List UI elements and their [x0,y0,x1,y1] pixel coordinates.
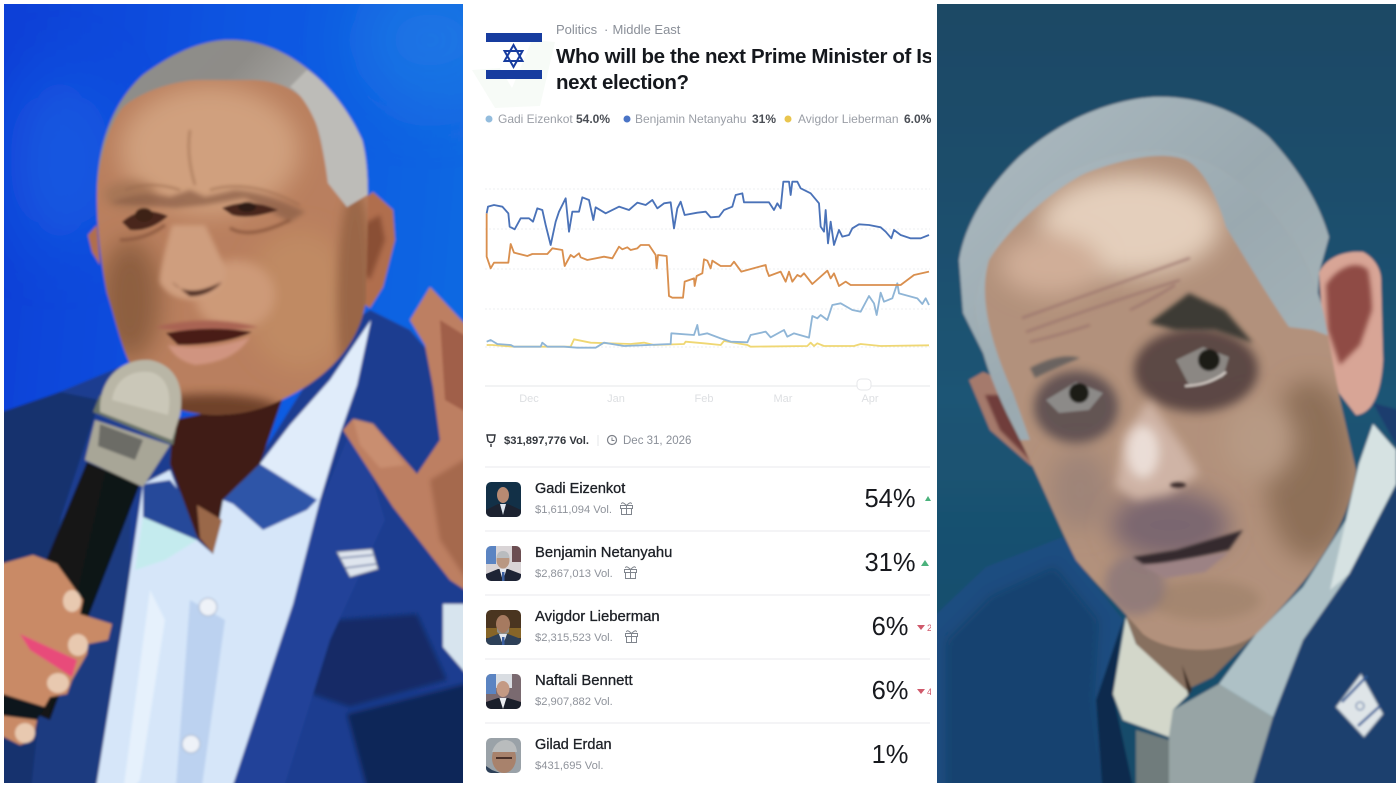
line: Naftali Bennett [487,213,929,298]
hair inner edge [960,140,1340,440]
flag pin [337,549,378,577]
mouth [155,320,258,365]
shirt buttons [182,598,217,753]
row: Benjamin Netanyahu [486,545,929,581]
category label: Politics [556,22,598,37]
forehead wrinkles [1022,258,1190,342]
jacket [56,309,463,783]
category label: · [604,22,608,37]
line: Gadi Eizenkot [487,283,929,348]
title: next election? [556,71,689,94]
hand on microphone [0,555,112,745]
row: Avigdor Lieberman: $2,315,523 Vol. [535,632,613,644]
market volume and end date: $31,897,776 Vol. [504,435,589,447]
eyes and brows [1030,293,1253,413]
legend [486,114,931,126]
watermark [472,40,555,108]
line chart: Feb [695,393,713,405]
collar right [1219,424,1396,717]
row: Avigdor Lieberman: 6% [872,613,908,641]
row: Gilad Erdan: $431,695 Vol. [535,760,603,772]
row: Gilad Erdan: Gilad Erdan [535,737,612,753]
row: Gadi Eizenkot [486,481,931,517]
row: Naftali Bennett: 4 [927,687,932,697]
row: Gilad Erdan [486,737,908,773]
row: Benjamin Netanyahu: 31% [864,549,916,577]
jacket left [925,537,1136,787]
icon: gift [626,631,638,642]
collar [260,320,371,500]
legend: Gadi Eizenkot [498,112,573,126]
category label [557,24,680,34]
title: Who will be the next Prime Minister of Israel [556,45,968,68]
nose [160,225,226,300]
market volume and end date: Dec 31, 2026 [623,435,691,447]
nose [1116,400,1199,500]
hair [959,97,1329,427]
legend: 54.0% [576,112,610,126]
hair [96,37,370,206]
line chart [485,182,930,405]
category label: Middle East [612,22,681,37]
icon: Israeli flag [486,33,542,79]
line chart: Dec [519,393,539,405]
ears [969,252,1383,470]
eyes and brows [110,190,305,240]
row: Naftali Bennett: Naftali Bennett [535,673,634,689]
row: Naftali Bennett [486,673,932,709]
row: Benjamin Netanyahu: Benjamin Netanyahu [535,545,672,561]
row: Gadi Eizenkot: 54% [864,485,916,513]
legend: 6.0% [904,112,932,126]
row: Naftali Bennett: $2,907,882 Vol. [535,696,613,708]
raised hand [342,285,463,592]
forehead creases [145,130,299,204]
neck [170,397,283,554]
microphone [38,358,184,721]
line: Avigdor Lieberman [487,339,929,347]
row: Avigdor Lieberman [486,609,932,645]
row: Avigdor Lieberman: 2 [927,623,932,633]
row: Gadi Eizenkot: Gadi Eizenkot [535,481,625,497]
line: Benjamin Netanyahu [487,182,929,245]
market volume and end date [487,435,691,447]
row: Naftali Bennett: 6% [872,677,908,705]
legend: Benjamin Netanyahu [635,112,746,126]
row: Gilad Erdan: 1% [872,741,908,769]
row: Benjamin Netanyahu: $2,867,013 Vol. [535,568,613,580]
cuff [440,602,463,674]
row: Gadi Eizenkot: $1,611,094 Vol. [535,504,612,516]
title [556,48,931,89]
line chart: Jan [607,393,625,405]
shirt [94,464,320,787]
legend: Avigdor Lieberman [798,112,899,126]
row: Avigdor Lieberman: Avigdor Lieberman [535,609,660,625]
flag pin [1336,674,1383,737]
neck [1126,610,1256,690]
photo: Gadi Eizenkot speaking into a microphone [4,4,463,783]
ears [88,192,395,308]
line chart: Apr [861,393,879,405]
mouth [1133,530,1243,578]
panel: Polymarket-style prediction market [485,24,931,773]
line chart: Mar [774,393,793,405]
icon: gift [620,503,632,514]
jacket right [1248,460,1400,787]
shirt front [1169,684,1273,787]
collar left [1113,617,1189,737]
head [960,140,1370,670]
icon: gift [624,567,636,578]
photo: Benjamin Netanyahu [920,0,1400,787]
head [94,37,370,416]
legend: 31% [752,112,776,126]
